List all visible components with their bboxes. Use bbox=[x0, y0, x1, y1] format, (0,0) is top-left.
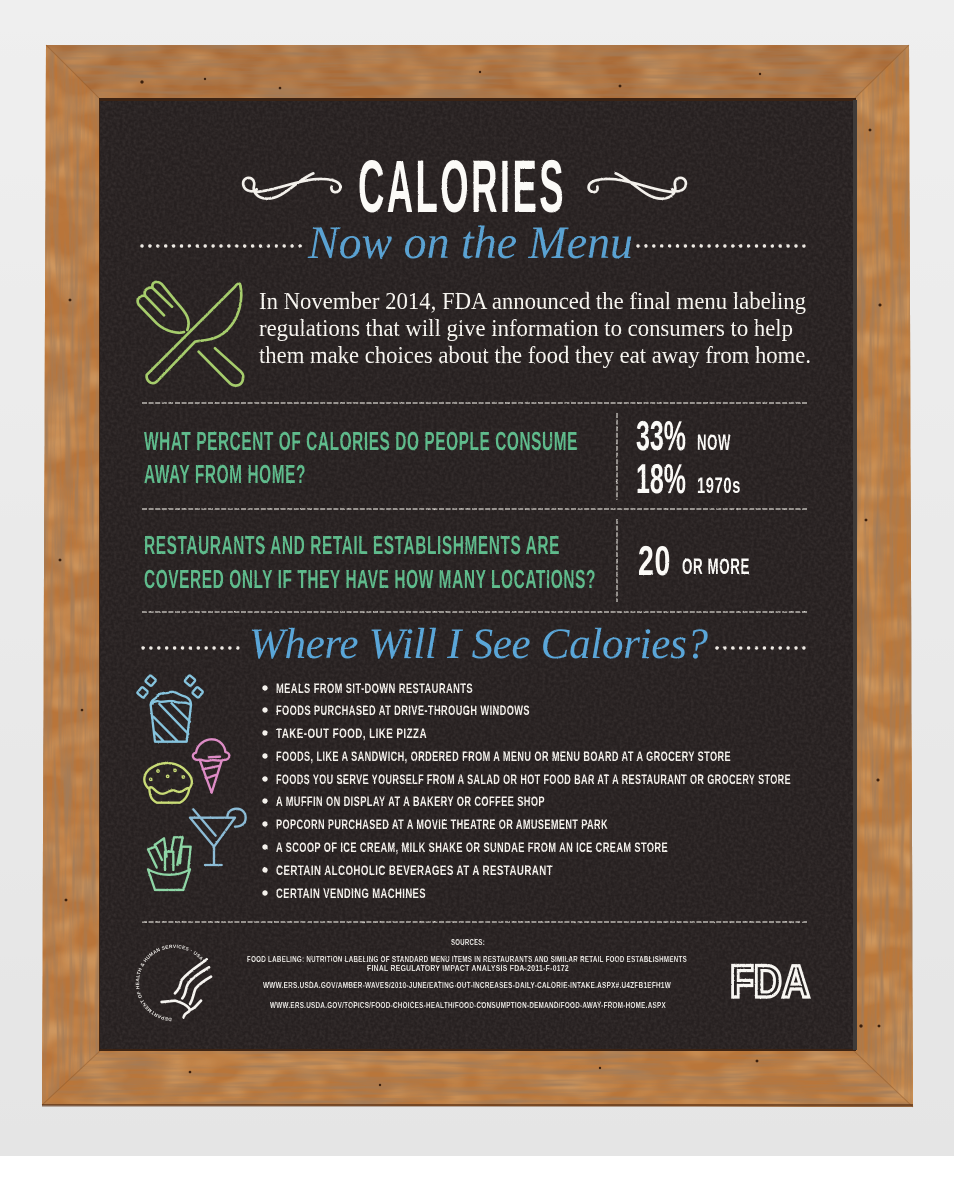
question 2: COVERED ONLY IF THEY HAVE HOW MANY LOCATIONS? bbox=[144, 564, 596, 594]
checklist: A MUFFIN ON DISPLAY AT A BAKERY OR COFFEE SHOP bbox=[276, 794, 545, 809]
answer 2: stat: OR MORE bbox=[682, 554, 750, 579]
checklist: CERTAIN ALCOHOLIC BEVERAGES AT A RESTAURANT bbox=[276, 863, 553, 878]
question 1: WHAT PERCENT OF CALORIES DO PEOPLE CONSUME bbox=[144, 426, 578, 456]
question 1 bbox=[144, 426, 578, 489]
answer 1: stats: 1970s bbox=[697, 473, 741, 498]
intro paragraph bbox=[259, 289, 811, 369]
icon: french fries bbox=[148, 837, 191, 890]
checklist: FOODS PURCHASED AT DRIVE-THROUGH WINDOWS bbox=[276, 703, 530, 718]
sources bbox=[247, 937, 687, 1010]
checklist: MEALS FROM SIT-DOWN RESTAURANTS bbox=[276, 681, 473, 696]
icon: left flourish bbox=[243, 173, 340, 199]
answer 1: stats: NOW bbox=[697, 430, 731, 455]
sources: SOURCES: bbox=[451, 937, 485, 947]
logo: FDA: FDA bbox=[730, 956, 810, 1007]
dashed dividers bbox=[142, 403, 808, 922]
answer 1: stats bbox=[636, 412, 741, 502]
icon group: foods and drinks bbox=[137, 675, 246, 890]
title bbox=[243, 145, 686, 228]
chalkboard bbox=[99, 98, 857, 1051]
title: CALORIES bbox=[358, 145, 566, 228]
answer 2: stat bbox=[638, 537, 750, 584]
answer 2: stat: 20 bbox=[638, 537, 671, 584]
checklist: POPCORN PURCHASED AT A MOVIE THEATRE OR AMUSEMENT PARK bbox=[276, 817, 608, 832]
icon: ice cream cone bbox=[193, 739, 229, 793]
logo: HHS seal: DEPARTMENT OF HEALTH & HUMAN SERVICES · USA bbox=[136, 944, 202, 1022]
subtitle with dotted rules: Now on the Menu bbox=[307, 217, 633, 269]
section heading: Where Will I See Calories: Where Will I See Calories? bbox=[249, 621, 708, 668]
question 2: RESTAURANTS AND RETAIL ESTABLISHMENTS ARE bbox=[144, 530, 560, 560]
answer 1: stats: 18% bbox=[636, 455, 686, 502]
checklist bbox=[262, 681, 791, 901]
sources: WWW.ERS.USDA.GOV/TOPICS/FOOD-CHOICES-HEALTH/FOOD-CONSUMPTION-DEMAND/FOOD-AWAY-FROM-HOME.ASPX bbox=[270, 1000, 666, 1010]
checklist: A SCOOP OF ICE CREAM, MILK SHAKE OR SUNDAE FROM AN ICE CREAM STORE bbox=[276, 840, 668, 855]
checklist: TAKE-OUT FOOD, LIKE PIZZA bbox=[276, 726, 427, 741]
checklist: CERTAIN VENDING MACHINES bbox=[276, 886, 426, 901]
sources: WWW.ERS.USDA.GOV/AMBER-WAVES/2010-JUNE/EATING-OUT-INCREASES-DAILY-CALORIE-INTAKE.ASPX#.U4ZFB1EFH1W bbox=[263, 980, 671, 990]
intro paragraph: regulations that will give information to consumers to help bbox=[259, 316, 793, 342]
answer 1: stats: 33% bbox=[636, 412, 686, 459]
checklist: FOODS, LIKE A SANDWICH, ORDERED FROM A MENU OR MENU BOARD AT A GROCERY STORE bbox=[276, 749, 731, 764]
question 1: AWAY FROM HOME? bbox=[144, 459, 306, 489]
sources: FINAL REGULATORY IMPACT ANALYSIS FDA-2011-F-0172 bbox=[367, 963, 569, 973]
intro paragraph: them make choices about the food they eat away from home. bbox=[259, 343, 811, 369]
icon: popcorn bbox=[137, 675, 203, 742]
intro paragraph: In November 2014, FDA announced the final menu labeling bbox=[259, 289, 806, 315]
icon: martini bbox=[190, 809, 246, 865]
icon: muffin bbox=[144, 763, 192, 803]
icon: right flourish bbox=[589, 173, 686, 199]
icon: fork and knife bbox=[138, 282, 243, 386]
question 2 bbox=[144, 530, 596, 594]
board content bbox=[136, 145, 811, 1022]
sources: FOOD LABELING: NUTRITION LABELING OF STANDARD MENU ITEMS IN RESTAURANTS AND SIMILAR RETAIL FOOD ESTABLISHMENTS bbox=[247, 954, 687, 964]
